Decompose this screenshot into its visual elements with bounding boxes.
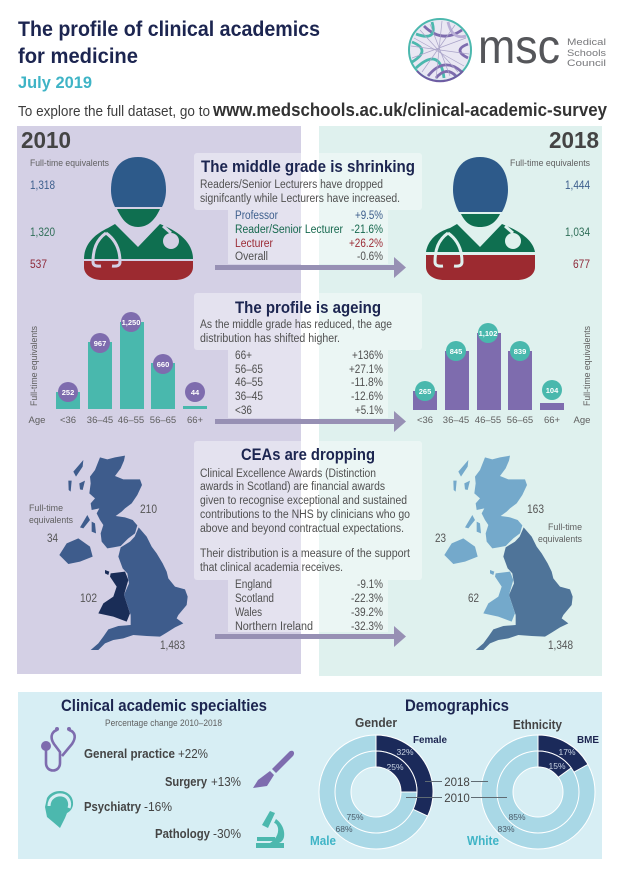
bar chart: age 2018: 104	[546, 386, 559, 395]
labels: UK map 2010: 1,483	[160, 640, 185, 652]
bar chart: age 2010: 252	[62, 388, 74, 397]
heading: specialties: Clinical academic specialties	[61, 696, 267, 715]
panel: 2018	[319, 126, 602, 676]
bar chart: age 2018: 56–65	[507, 415, 533, 426]
heading: ethnicity: Ethnicity	[513, 717, 563, 732]
icon: doctor 2018	[426, 157, 535, 280]
panel: 2010	[17, 126, 301, 674]
icon: doctor 2010	[84, 157, 193, 280]
labels: UK map 2018: Full-time	[548, 522, 582, 533]
description: ageing	[200, 319, 392, 345]
bar chart: age 2010: Full-time equivalents	[29, 326, 40, 406]
donut category labels: Male	[310, 834, 336, 848]
table: grade change: -21.6%	[351, 224, 383, 236]
description: ageing: distribution has shifted higher.	[200, 333, 340, 345]
table: age change: <36	[235, 405, 252, 417]
table: grade change: +9.5%	[355, 210, 383, 222]
grade counts 2010: 1,318	[30, 180, 55, 192]
labels: UK map 2010: 102	[80, 593, 97, 605]
labels: UK map 2010: 34	[47, 533, 59, 545]
arrow: age	[215, 411, 406, 432]
icon: head	[45, 791, 73, 828]
donut ring legend	[406, 777, 507, 805]
grade counts 2018	[510, 158, 591, 271]
description: CEAs: above and beyond contractual expectations.	[200, 523, 404, 535]
bar chart: age 2010: 36–45	[87, 415, 113, 426]
label: general practice: +22%	[178, 747, 208, 761]
labels: UK map 2018	[435, 504, 582, 652]
labels: UK map 2010: 210	[140, 504, 157, 516]
donut value labels: 15%	[548, 761, 566, 771]
heading: ageing: The profile is ageing	[235, 298, 381, 317]
table: CEA change: Scotland	[235, 593, 274, 605]
table: grade change: Overall	[235, 251, 268, 263]
chart: ethnicity donut	[481, 735, 595, 849]
description: CEAs: Their distribution is a measure of the support	[200, 548, 411, 560]
table: age change: 36–45	[235, 391, 263, 403]
bar chart: age 2018	[413, 323, 593, 426]
description: CEAs: Clinical Excellence Awards (Distinction	[200, 468, 376, 480]
table: age change: -12.6%	[351, 391, 383, 403]
table: CEA change: Northern Ireland	[235, 621, 313, 633]
year 2018: 2018	[549, 127, 599, 153]
table: grade change: -0.6%	[357, 251, 383, 263]
panel: ageing text box	[194, 293, 422, 418]
table: grade change: Lecturer	[235, 238, 273, 250]
grade counts 2018: Full-time equivalents	[510, 158, 590, 169]
panel: middle grade text box	[194, 153, 422, 264]
bar chart: age 2018: Age	[574, 415, 590, 426]
donut value labels: 25%	[386, 762, 404, 772]
map: UK 2018	[444, 456, 573, 650]
label: pathology: Pathology	[155, 827, 210, 841]
logo: Medical Schools Council: Council	[567, 58, 606, 69]
grade counts 2018: 1,444	[565, 180, 591, 192]
donut value labels: 68%	[335, 824, 353, 834]
bar chart: age 2010: 46–55	[118, 415, 144, 426]
bar chart: age 2010: 44	[191, 388, 200, 397]
grade counts 2010: Full-time equivalents	[30, 158, 109, 169]
label: pathology: -30%	[213, 827, 241, 841]
description: CEAs: given to recognise exceptional and sustained	[200, 495, 407, 507]
donut value labels: 17%	[558, 747, 576, 757]
donut category labels: White	[467, 834, 499, 848]
label: psychiatry: -16%	[144, 800, 172, 814]
grade counts 2010: 1,320	[30, 227, 55, 239]
description: middle grade	[200, 179, 400, 205]
donut category labels	[310, 734, 599, 848]
grade counts 2010: 537	[30, 259, 47, 271]
table: CEA change: England	[235, 579, 272, 591]
table: CEA change: -39.2%	[351, 607, 383, 619]
donut value labels	[335, 747, 576, 834]
bar chart: age 2010: 660	[157, 360, 169, 369]
bar chart: age 2018: 845	[450, 347, 462, 356]
donut value labels: 75%	[346, 812, 364, 822]
title: for medicine	[18, 45, 138, 68]
table: CEA change: -32.3%	[351, 621, 383, 633]
donut value labels: 85%	[508, 812, 526, 822]
icon: stethoscope	[41, 727, 75, 770]
arrow: CEAs	[215, 626, 406, 647]
bar chart: age 2010: <36	[60, 415, 76, 426]
bar chart: age 2010: 56–65	[150, 415, 176, 426]
bar chart: age 2018: 265	[419, 387, 431, 396]
heading: CEAs: CEAs are dropping	[241, 445, 375, 464]
logo: Medical Schools Council: Medical	[567, 37, 606, 48]
labels: UK map 2010: Full-time	[29, 503, 63, 514]
label: psychiatry: Psychiatry	[84, 800, 141, 814]
bar chart: age 2018: 1,102	[479, 329, 497, 338]
description: middle grade: signifcantly while Lecturers have increased.	[200, 193, 400, 205]
bar chart: age 2018: 46–55	[475, 415, 501, 426]
bar chart: age 2010: 967	[94, 339, 106, 348]
table: age change: +5.1%	[355, 405, 383, 417]
table: age change: 66+	[235, 350, 252, 362]
description: middle grade: Readers/Senior Lecturers have dropped	[200, 179, 383, 191]
description: CEAs: that clinical academia receives.	[200, 562, 343, 574]
bar chart: age 2010	[29, 312, 207, 426]
labels: UK map 2018: 1,348	[548, 640, 573, 652]
panel: bottom	[18, 692, 602, 859]
map: UK 2010	[59, 456, 188, 650]
label: surgery: +13%	[211, 775, 241, 789]
panel: CEAs text box	[194, 441, 422, 633]
table: age change: +136%	[352, 350, 383, 362]
title: The profile of clinical academics	[18, 18, 320, 41]
label: general practice: General practice	[84, 747, 175, 761]
caption: percentage change: Percentage change 2010–2018	[105, 718, 222, 729]
description: CEAs	[200, 468, 411, 574]
grade counts 2018: 1,034	[565, 227, 591, 239]
description: CEAs: contributions to the NHS by clinicians who go	[200, 509, 410, 521]
logo: Medical Schools Council: msc	[478, 21, 560, 74]
table: age change: +27.1%	[349, 364, 383, 376]
donut category labels: BME	[577, 734, 599, 746]
heading: middle grade: The middle grade is shrinking	[201, 157, 415, 176]
table: age change: 46–55	[235, 377, 263, 389]
grade counts 2018: 677	[573, 259, 590, 271]
labels: UK map 2010: equivalents	[29, 515, 73, 526]
labels: UK map 2018: 62	[468, 593, 479, 605]
label: surgery	[165, 775, 241, 789]
icon: microscope	[256, 811, 284, 848]
bar chart: age 2010: 1,250	[122, 318, 140, 327]
table: age change: 56–65	[235, 364, 263, 376]
icon: scalpel	[253, 751, 294, 788]
bar chart: age 2018: 36–45	[443, 415, 469, 426]
year 2010: 2010	[21, 127, 71, 153]
chart: gender donut	[319, 735, 433, 849]
donut ring legend: 2018	[444, 777, 470, 789]
table: grade change: Reader/Senior Lecturer	[235, 224, 343, 236]
bar chart: age 2018: 66+	[544, 415, 561, 426]
date: July 2019	[18, 74, 92, 92]
labels: UK map 2018: 23	[435, 533, 446, 545]
bar chart: age 2010: Age	[29, 415, 45, 426]
bar chart: age 2010: 66+	[187, 415, 204, 426]
description: CEAs: awards in Scotland) are financial awards	[200, 481, 385, 493]
table: CEA change: -22.3%	[351, 593, 383, 605]
logo: Medical Schools Council	[409, 19, 606, 81]
table: age change	[235, 350, 383, 417]
bar chart: age 2018: <36	[417, 415, 433, 426]
grade counts 2010	[30, 158, 109, 271]
labels: UK map 2010	[29, 503, 185, 652]
labels: UK map 2018: equivalents	[538, 534, 582, 545]
logo: Medical Schools Council: Schools	[567, 48, 606, 59]
label: surgery: Surgery	[165, 775, 207, 789]
arrow: grades	[215, 257, 406, 278]
heading: gender: Gender	[355, 715, 397, 730]
table: grade change: +26.2%	[349, 238, 383, 250]
dataset link line: To explore the full dataset, go to	[18, 103, 210, 120]
table: CEA change: -9.1%	[357, 579, 383, 591]
table: CEA change: Wales	[235, 607, 262, 619]
donut category labels: Female	[413, 734, 447, 746]
table: age change: -11.8%	[351, 377, 383, 389]
table: grade change	[235, 210, 383, 263]
bar chart: age 2018: Full-time equivalents	[582, 326, 593, 406]
title	[18, 18, 320, 68]
dataset link line	[18, 100, 607, 120]
donut value labels: 83%	[497, 824, 515, 834]
donut value labels: 32%	[396, 747, 414, 757]
bar chart: age 2018: 839	[514, 347, 526, 356]
labels: UK map 2018: 163	[527, 504, 544, 516]
donut ring legend: 2010	[444, 793, 470, 805]
heading: demographics: Demographics	[405, 696, 509, 715]
description: ageing: As the middle grade has reduced, the age	[200, 319, 392, 331]
table: CEA change	[235, 579, 383, 633]
table: grade change: Professor	[235, 210, 278, 222]
